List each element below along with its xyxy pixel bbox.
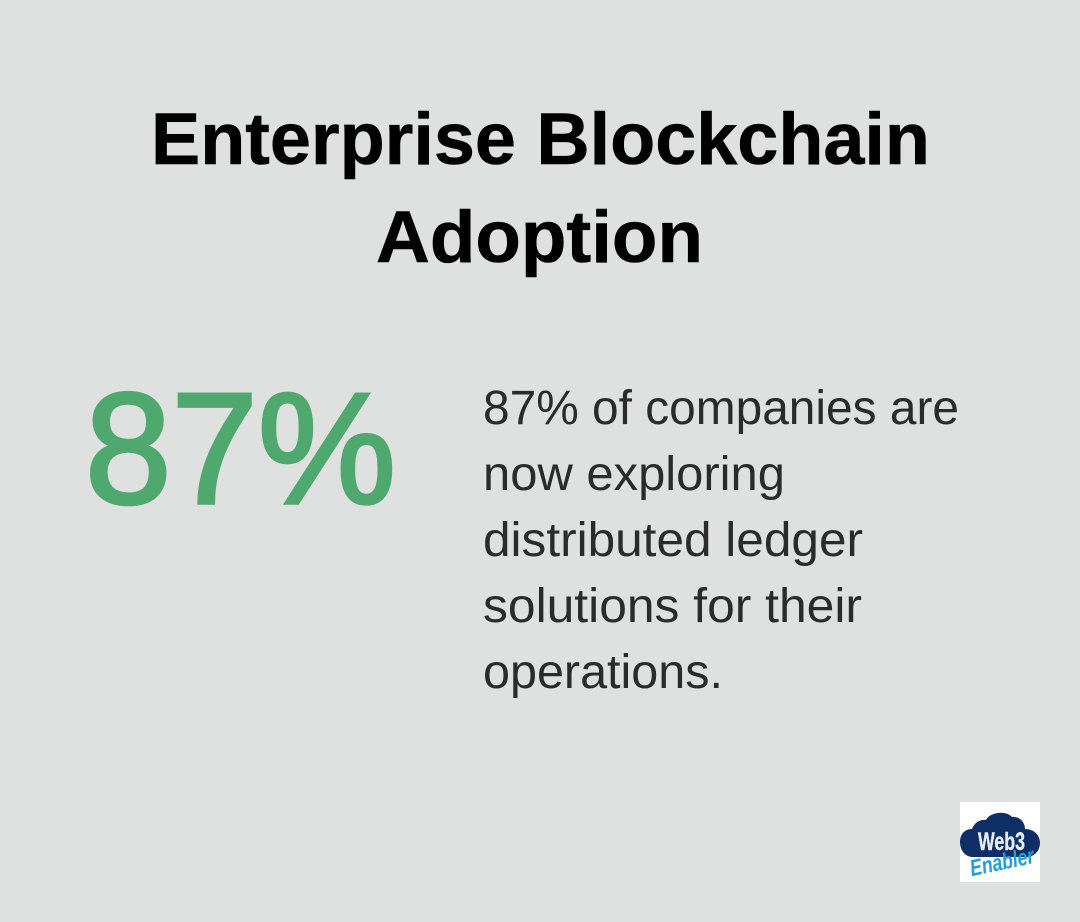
description text: solutions for their	[483, 580, 862, 633]
description text: operations.	[483, 646, 723, 699]
description text: 87% of companies are	[483, 382, 959, 435]
logo: Web3 Enabler	[960, 802, 1040, 882]
description text: now exploring	[483, 448, 785, 501]
statistic: 87%: 87%	[85, 361, 396, 537]
title: Adoption	[376, 197, 703, 278]
description text: distributed ledger	[483, 514, 863, 567]
title: Enterprise Blockchain	[151, 99, 930, 180]
logo wordmark: Web3: Web3	[978, 828, 1025, 856]
icon: cloud	[960, 813, 1040, 857]
title	[151, 99, 930, 278]
logo wordmark: Enabler: Enabler	[967, 842, 1037, 881]
description text	[483, 382, 959, 699]
